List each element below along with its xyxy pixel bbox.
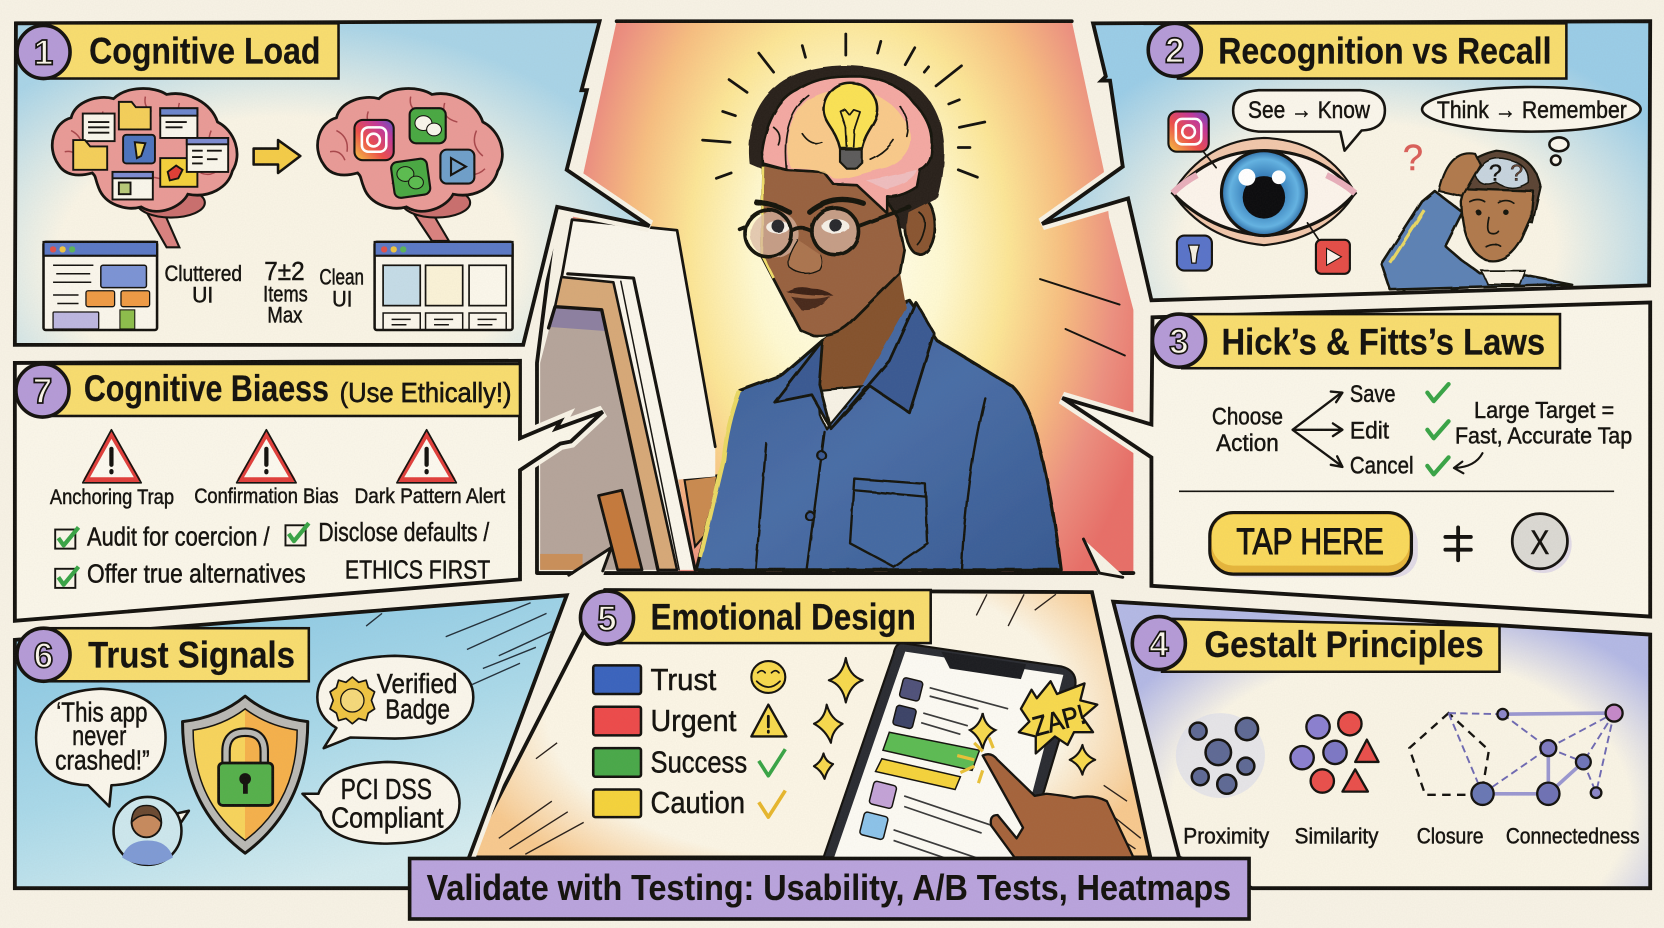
- chat icon: [410, 108, 446, 143]
- motion lines: [1040, 279, 1125, 355]
- captions: UI: [332, 287, 352, 312]
- heading: cognitive load: 1: [34, 34, 53, 73]
- pci dss bubble: Compliant: [331, 803, 444, 835]
- heading: recognition vs recall: 2: [1165, 32, 1185, 71]
- heading: cognitive biases: (Use Ethically!): [340, 377, 512, 408]
- cluttered UI window: [44, 242, 157, 330]
- panel frame: [15, 21, 649, 345]
- panel frame: [468, 590, 1150, 857]
- caution check: [759, 791, 785, 817]
- heading: cognitive biases: Cognitive Biaess: [84, 367, 329, 409]
- question marks: [1403, 137, 1523, 185]
- colour labels: [651, 662, 747, 820]
- colour labels: Success: [651, 745, 747, 780]
- heading: gestalt principles: [1132, 617, 1500, 672]
- testimonial bubble: [36, 689, 166, 806]
- branching arrows: [1293, 392, 1342, 467]
- question marks: ?: [1489, 159, 1502, 185]
- hand: [957, 738, 1133, 857]
- checkbox items: Offer true alternatives: [87, 561, 306, 589]
- smiley: [751, 661, 785, 693]
- colour swatches: [593, 665, 641, 817]
- idea rays: [703, 34, 985, 178]
- heading: trust signals: Trust Signals: [88, 633, 295, 675]
- person: [696, 65, 1061, 570]
- captions: Clean: [319, 264, 364, 289]
- security shield: [183, 696, 308, 853]
- glasses and eyes: [750, 211, 799, 258]
- testimonial bubble: ‘This app: [56, 697, 148, 728]
- choice labels: Edit: [1350, 417, 1389, 444]
- banner: validate with testing: [410, 858, 1249, 919]
- testimonial bubble: never: [72, 720, 126, 751]
- thought bubbles: [1549, 137, 1568, 165]
- tap sparkle star: [970, 713, 995, 749]
- small x button: X: [1530, 524, 1549, 562]
- heading: cognitive load: Cognitive Load: [89, 30, 320, 72]
- shirt pocket: [850, 479, 928, 567]
- large target note: [1455, 397, 1632, 449]
- user avatar: [114, 797, 189, 865]
- gestalt labels: Connectedness: [1506, 824, 1640, 849]
- instagram icon: [354, 120, 394, 160]
- green check marks: [1427, 384, 1449, 474]
- heading: cognitive biases: 7: [33, 372, 52, 411]
- choice labels: [1212, 381, 1414, 479]
- question marks: ?: [1510, 159, 1523, 185]
- success check: [759, 749, 785, 776]
- exposed brain: [762, 76, 932, 213]
- central background burst: [538, 21, 1133, 572]
- gestalt labels: Closure: [1417, 824, 1484, 849]
- bubble: see know: See → Know: [1248, 97, 1370, 124]
- panel 4: gestalt principles: [1113, 602, 1650, 888]
- heading: hick's and fitts's laws: Hick’s & Fitts’s Laws: [1221, 320, 1545, 362]
- captions: UI: [192, 282, 213, 307]
- checkbox items: Disclose defaults /: [318, 519, 490, 547]
- bubble: think remember: [1422, 87, 1641, 132]
- heading: recognition vs recall: [1148, 23, 1566, 79]
- heading: cognitive load: [17, 23, 339, 79]
- speed streaks: [366, 603, 552, 684]
- proximity dots: [1176, 713, 1265, 798]
- large target note: Fast, Accurate Tap: [1455, 423, 1632, 449]
- phone: [824, 643, 1076, 867]
- left brain with clutter: [52, 89, 237, 247]
- panel 1: cognitive load: [15, 21, 649, 345]
- captions: 7±2: [264, 258, 305, 286]
- similarity shapes: [1290, 712, 1379, 793]
- light bulb: [824, 83, 878, 149]
- face: [762, 164, 904, 336]
- checkbox items: ETHICS FIRST: [345, 556, 490, 584]
- panel 7: cognitive biases: [15, 361, 603, 621]
- bubble: think remember: Think → Remember: [1437, 97, 1627, 124]
- warning triangles: [83, 430, 456, 483]
- heading: emotional design: 5: [597, 599, 617, 638]
- colour labels: Urgent: [651, 703, 737, 738]
- collars: [775, 341, 831, 429]
- heading: hick's and fitts's laws: [1152, 314, 1560, 368]
- panel frame: [15, 595, 567, 888]
- colour labels: Trust: [651, 662, 717, 697]
- blue icon: [1177, 236, 1212, 271]
- heading: hick's and fitts's laws: 3: [1169, 322, 1189, 361]
- panel: central designer portrait: [537, 21, 1133, 577]
- bottom spikes: [569, 539, 1125, 577]
- captions: Max: [267, 303, 302, 328]
- checkbox items: Audit for coercion /: [87, 523, 270, 551]
- heading: gestalt principles: 4: [1149, 625, 1169, 664]
- connectedness network: [1449, 705, 1623, 805]
- heading: emotional design: [580, 590, 931, 644]
- heading: recognition vs recall: Recognition vs Recall: [1218, 30, 1552, 72]
- tap here button: TAP HERE: [1236, 520, 1384, 562]
- right brain with apps: [318, 89, 502, 241]
- question marks: ?: [1403, 137, 1423, 178]
- brain clutter items: [73, 102, 228, 200]
- pci dss bubble: [302, 762, 460, 844]
- bias labels: Anchoring Trap: [50, 486, 174, 509]
- verified badge bubble: [317, 656, 473, 748]
- warning icon: [751, 705, 786, 736]
- heading: trust signals: 6: [34, 636, 53, 675]
- easel and canvas: [537, 204, 1133, 573]
- undershirt: [818, 386, 862, 429]
- bias labels: Dark Pattern Alert: [354, 485, 505, 508]
- shirt details: [756, 398, 985, 570]
- bias labels: [50, 485, 505, 509]
- curved arrow: [1454, 453, 1483, 473]
- tap here button: [1210, 513, 1418, 577]
- bias labels: Confirmation Bias: [194, 485, 339, 508]
- verified badge bubble: Badge: [385, 693, 450, 724]
- large target note: Large Target =: [1474, 397, 1614, 423]
- small x button: [1512, 514, 1572, 573]
- panel frame: [1042, 21, 1650, 300]
- choice labels: Save: [1350, 381, 1396, 408]
- panel frame: [1062, 302, 1650, 617]
- closure pentagon: [1409, 713, 1489, 795]
- zap burst: ZAP!: [1029, 699, 1088, 742]
- play icon: [440, 150, 474, 184]
- checkbox items: [55, 519, 490, 589]
- heading: trust signals: [17, 628, 309, 681]
- banner: validate with testing: Validate with Testing: Usability, A/B Tests, Heatmaps: [427, 867, 1231, 908]
- zap burst: [1019, 681, 1097, 753]
- confused person: [1382, 151, 1572, 290]
- testimonial bubble: crashed!”: [55, 744, 150, 775]
- gestalt labels: Proximity: [1183, 824, 1270, 849]
- heading: gestalt principles: Gestalt Principles: [1204, 623, 1484, 665]
- eye illustration: [1173, 138, 1355, 245]
- panel frame: [1113, 602, 1650, 888]
- bubble: see know: [1233, 90, 1385, 151]
- arrow: [254, 140, 300, 173]
- pci dss bubble: PCI DSS: [341, 774, 432, 806]
- heading: cognitive biases: [16, 364, 520, 417]
- second chat icon: [390, 158, 431, 199]
- panel frame: [15, 361, 603, 621]
- panel 3: hick's and fitts's laws: [1062, 302, 1650, 617]
- captions: [164, 258, 364, 328]
- panel 6: trust signals: [15, 595, 567, 888]
- captions: Cluttered: [164, 261, 242, 286]
- shirt: [696, 300, 1061, 570]
- panel 5: emotional design: [468, 590, 1150, 867]
- choice labels: Action: [1216, 430, 1279, 457]
- nose and mouth: [788, 240, 822, 273]
- video icon: [1307, 223, 1350, 274]
- not equal sign: [1445, 527, 1471, 560]
- colour labels: Caution: [651, 785, 745, 820]
- heading: emotional design: Emotional Design: [651, 595, 916, 637]
- sparkles: [814, 658, 1095, 779]
- ear: [905, 197, 935, 255]
- gestalt labels: Similarity: [1295, 824, 1379, 849]
- choice labels: Choose: [1212, 403, 1283, 430]
- top edge: [617, 20, 1072, 23]
- badge icon: [330, 677, 375, 724]
- verified badge bubble: Verified: [377, 668, 457, 699]
- choice labels: Cancel: [1350, 452, 1414, 479]
- neck: [818, 273, 906, 429]
- instagram icon: [1168, 111, 1216, 168]
- gestalt labels: [1183, 824, 1640, 849]
- clean UI window: [375, 242, 513, 330]
- hair: [748, 65, 944, 230]
- panel 2: recognition vs recall: [1042, 21, 1650, 300]
- captions: Items: [263, 281, 308, 306]
- burst hatching: [499, 594, 1141, 854]
